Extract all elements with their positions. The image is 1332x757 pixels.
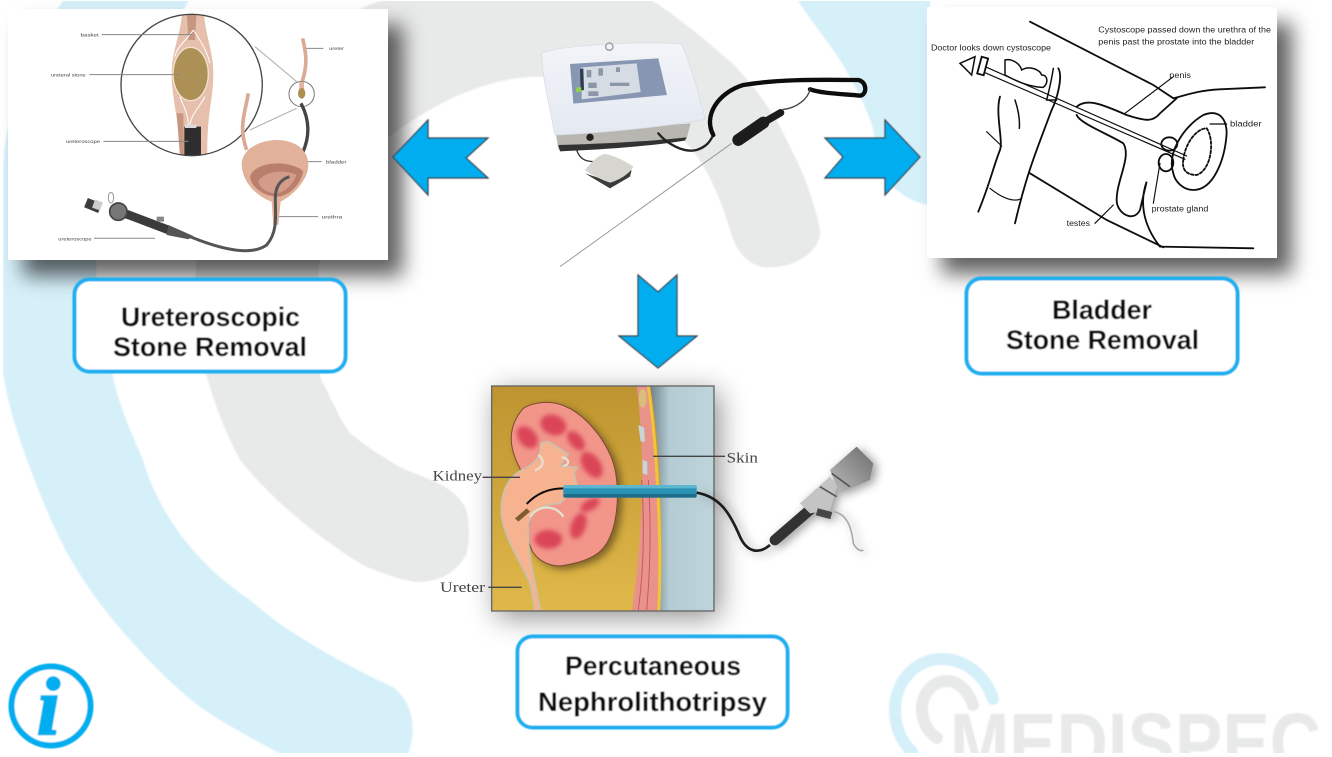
- console body: [542, 43, 705, 135]
- label: percutaneous nephrolithotripsy: Percutaneous: [565, 651, 741, 681]
- blue swoosh upper right: [796, 0, 930, 205]
- renal pyramids: [513, 411, 607, 549]
- label: bladder stone removal: Stone Removal: [1006, 325, 1199, 355]
- panel: kidney illustration: [433, 386, 759, 611]
- grey swoosh: [195, 0, 820, 582]
- label: percutaneous nephrolithotripsy: Nephrolithotripsy: [538, 687, 767, 717]
- panel: ureteroscopic illustration: [8, 9, 388, 260]
- kidney shadow: [516, 406, 622, 569]
- text: cystoscopy annotations: penis past the prostate into the bladder: [1098, 37, 1255, 47]
- labels: kidney diagram: [483, 456, 725, 587]
- panel: ureteroscopic illustration: ureteroscope: [58, 236, 92, 242]
- logo: Medispec watermark: [895, 659, 1321, 757]
- panel: ureteroscopic illustration: ureteral stone: [51, 72, 86, 78]
- panel: ureteroscopic illustration: basket: [81, 33, 99, 39]
- icon: information: i: [37, 661, 60, 752]
- tube and wires: [527, 488, 563, 504]
- console base: [556, 123, 691, 149]
- handpiece and fibre: [560, 113, 781, 267]
- device: laser console with handpiece: [542, 43, 865, 267]
- text: cystoscopy annotations: testes: [1067, 218, 1090, 228]
- cables: [658, 80, 865, 151]
- panel: bladder line drawing: [927, 7, 1277, 258]
- skin layers: [632, 386, 661, 611]
- arrow: right: [825, 120, 920, 195]
- text: cystoscopy annotations: [931, 25, 1271, 228]
- text: cystoscopy annotations: bladder: [1230, 119, 1262, 129]
- foot pedal: [577, 150, 633, 188]
- labels: ureteroscopy diagram: [89, 35, 323, 238]
- label: bladder stone removal: Bladder: [1052, 295, 1152, 325]
- text: cystoscopy annotations: Doctor looks down cystoscope: [931, 43, 1051, 53]
- label: ureteroscopic stone removal: Stone Removal: [113, 332, 307, 362]
- panel: kidney illustration: Kidney: [433, 468, 483, 484]
- panel: ureteroscopic illustration: ureter: [329, 46, 344, 52]
- label: ureteroscopic stone removal: Ureteroscopic: [121, 302, 300, 332]
- panel: ureteroscopic illustration: urethra: [322, 214, 343, 220]
- background swooshes: [3, 0, 930, 757]
- kidney shape: [511, 402, 617, 566]
- arrow: left: [393, 120, 488, 195]
- panel: ureteroscopic illustration: bladder: [326, 159, 347, 165]
- illustration: enlarged stone in ureter: [121, 10, 262, 157]
- panel: kidney illustration: Skin: [727, 451, 759, 467]
- illustration: cystoscopy line drawing: [960, 22, 1265, 248]
- label: percutaneous nephrolithotripsy: [518, 636, 788, 728]
- text: cystoscopy annotations: Cystoscope passed down the urethra of the: [1098, 25, 1271, 35]
- endoscope with cable: [697, 447, 873, 551]
- touch screen: [570, 58, 667, 104]
- text: cystoscopy annotations: penis: [1169, 70, 1191, 80]
- renal pelvis and ureter: [501, 442, 577, 611]
- illustration: ureter, bladder and scope: [86, 38, 314, 251]
- arrow: down: [619, 275, 697, 368]
- icon: information: [12, 661, 90, 752]
- panel: ureteroscopic illustration: ureteroscope: [66, 139, 100, 145]
- text: cystoscopy annotations: prostate gland: [1152, 204, 1209, 214]
- panel: kidney illustration: Ureter: [440, 580, 485, 596]
- label: bladder stone removal: [966, 278, 1238, 374]
- blue swoosh: [3, 0, 413, 757]
- label: ureteroscopic stone removal: [74, 280, 346, 372]
